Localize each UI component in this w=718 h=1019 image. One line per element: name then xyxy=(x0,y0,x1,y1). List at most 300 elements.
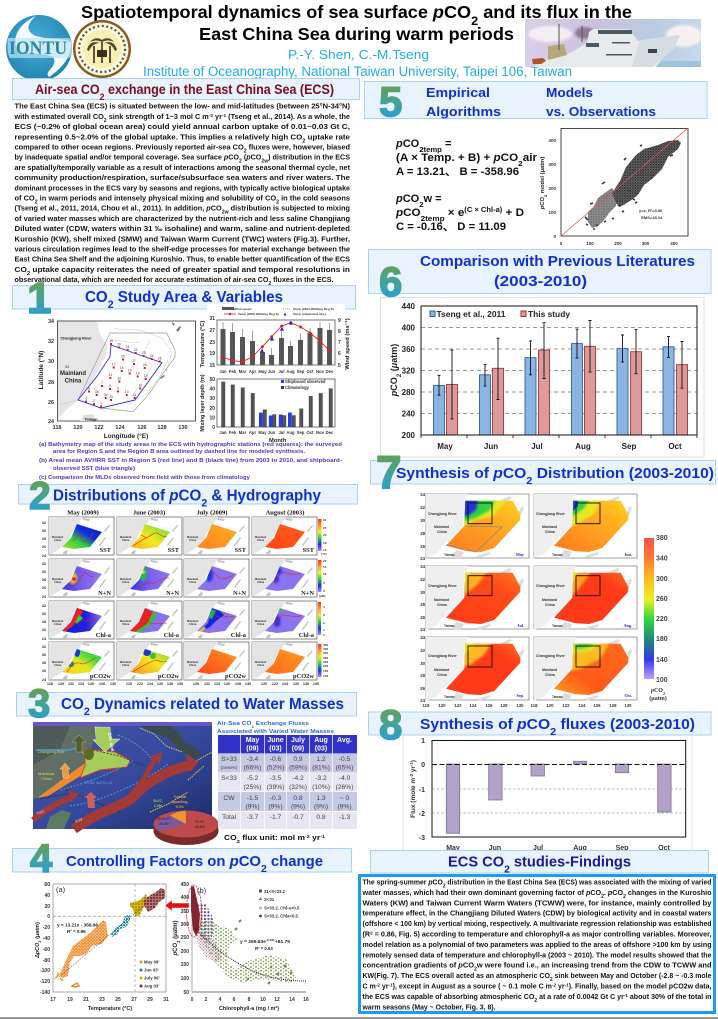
row: Chl-a: China xyxy=(122,622,130,626)
flux table: -0.5 xyxy=(339,756,351,763)
chart b: chlorophyll vs pCO2: 31<S<33.2 xyxy=(264,889,286,894)
heading 3 xyxy=(16,682,356,726)
colour bars: 2 xyxy=(323,621,325,625)
flux table: (10%) xyxy=(312,784,330,791)
station numbers: 33 xyxy=(109,395,113,399)
heading 4 xyxy=(12,837,352,881)
station numbers: 2 xyxy=(93,399,95,403)
panel: 6 comparison xyxy=(368,250,711,457)
chart b: chlorophyll vs pCO2: 16 xyxy=(303,997,309,1003)
intro text block: Diluted water (CDW, waters within 31 ‰ isohaline) and warm, saline and nutrient-depleted xyxy=(14,224,350,233)
row: pCO2w: China xyxy=(54,663,62,667)
axes labels: 28 xyxy=(42,537,46,541)
chart b: chlorophyll vs pCO2: 50 xyxy=(183,990,189,996)
panel: 3 water masses xyxy=(16,682,357,845)
chart b: chlorophyll vs pCO2: 6 xyxy=(233,997,236,1003)
intro text block: are spatially/temporally variable as a result of interactions among the seasonal thermal cycle, net xyxy=(14,163,351,172)
axis ticks: 32 xyxy=(420,505,426,510)
colour scale: 140 xyxy=(656,657,668,664)
flux table: -3.4 xyxy=(247,756,259,763)
flux table: (9%) xyxy=(291,804,305,810)
axes labels: 122 xyxy=(204,682,210,686)
heading: air-sea CO2 exchange: Air-sea CO2 exchange in the East China Sea (ECS) xyxy=(35,82,334,102)
colour bars: 250 xyxy=(323,660,328,664)
flux table: -1.3 xyxy=(339,814,351,821)
row: SST xyxy=(49,517,317,555)
colour bars: 4 xyxy=(323,605,325,609)
algorithm equations: pCO2temp × e(C × Chl-a) + D xyxy=(395,206,524,222)
panel: 4 controlling factors xyxy=(12,837,352,1012)
flux table: Air-Sea CO 2 Exchange Fluxes xyxy=(217,721,309,728)
scatter: model vs observations: 300 xyxy=(642,241,650,246)
axes labels: 28 xyxy=(42,578,46,582)
map: Jun: Taiwan xyxy=(552,553,563,557)
intro text block: compared to other ocean regions. Previously reported air-sea CO 2 fluxes were, however, biased xyxy=(14,142,350,154)
axes labels: 26 xyxy=(42,628,46,632)
axis ticks: 34 xyxy=(420,564,426,569)
station numbers: 13 xyxy=(144,374,148,378)
axes labels: 128 xyxy=(99,682,105,686)
axis ticks: 130 xyxy=(624,703,632,708)
chart a: temperature vs delta pCO2: May 09' xyxy=(144,960,159,964)
map: Sep: Taiwan xyxy=(444,695,455,699)
row: SST: Mainland xyxy=(255,535,267,539)
chart a: temperature vs delta pCO2: y = 13.21x - 358.96 xyxy=(57,922,99,928)
ship photo xyxy=(525,19,702,67)
colour bars: 100 xyxy=(323,674,328,678)
chart: mixing layer depth: Mar xyxy=(239,430,247,435)
row: pCO2w: pCO2w xyxy=(158,673,179,680)
axes labels: 24 xyxy=(42,554,47,558)
intro text block: dominant processes in the ECS vary by seasons and regions, with typically active biological uptake xyxy=(14,183,350,192)
bar chart: pCO2 comparison: Sep xyxy=(622,442,636,451)
chart: temperature and wind speed: Mar xyxy=(239,369,247,374)
intro text block: observational data, which are needed for accurate estimation of air-sea CO2 fluxes in the ECS. xyxy=(14,275,334,287)
axis ticks: 122 xyxy=(454,703,462,708)
chart b: chlorophyll vs pCO2: 400 xyxy=(181,895,189,901)
axis ticks: 124 xyxy=(469,703,477,708)
algorithm equations: pCO2temp = xyxy=(395,138,451,154)
map: water masses: China xyxy=(41,776,52,781)
chart: mixing layer depth: Month xyxy=(269,438,287,444)
chart a: temperature vs delta pCO2: 31 xyxy=(163,997,169,1003)
axes labels: 130 xyxy=(313,682,319,686)
row: Chl-a: China xyxy=(54,622,62,626)
affiliation: Institute of Oceanography, National Taiwan University, Taipei 106, Taiwan xyxy=(143,64,572,79)
heading 6: (2003-2010) xyxy=(494,274,587,290)
colour bars: (°C) xyxy=(321,552,327,556)
findings text: temperature effect, in the Changjiang Diluted Waters (CDW) by biological activity and in coastal waters xyxy=(362,909,712,918)
station numbers: 18 xyxy=(120,366,124,370)
bar chart: pCO2 comparison: This study xyxy=(528,310,571,319)
scatter: model vs observations: pCO2 model (μatm) xyxy=(540,157,548,210)
intro text block: of varied water masses which are characterized by the nutrient-rich and less saline Changjiang xyxy=(14,214,350,223)
chart a: temperature vs delta pCO2: 40 xyxy=(44,893,50,899)
flux table: Total xyxy=(222,814,237,821)
flux table: -1.5 xyxy=(247,795,259,802)
flux table: (9%) xyxy=(337,804,352,810)
heading 5: Empirical xyxy=(426,86,490,100)
flux table: (52%) xyxy=(267,764,284,772)
heading: findings: ECS CO2 studies-Findings xyxy=(448,854,631,876)
chart: temperature and wind speed: Oct xyxy=(307,369,314,374)
column headers: June (2003) xyxy=(133,510,165,516)
chart a: temperature vs delta pCO2: 21 xyxy=(83,997,89,1003)
flux table: Avg. xyxy=(337,737,352,744)
chart b: chlorophyll vs pCO2: 10 xyxy=(260,997,266,1003)
flux bar chart: May xyxy=(446,845,460,852)
map: Jun: Jun. xyxy=(624,552,632,557)
intro text block: community production/respiration, surface/subsurface sea waters and river waters. The xyxy=(14,173,350,182)
axis ticks: 32 xyxy=(420,577,426,582)
scatter: model vs observations: 200 xyxy=(548,186,556,191)
map: study area: Latitude (°N) xyxy=(37,351,45,389)
chart: mixing layer depth: Nov xyxy=(316,430,325,435)
chart: temperature and wind speed: 9 xyxy=(338,318,341,324)
axes labels: 30 xyxy=(42,612,46,616)
map: May: Taiwan xyxy=(444,553,455,557)
station numbers: 28 xyxy=(143,363,147,367)
chart b: chlorophyll vs pCO2: 150 xyxy=(181,962,189,968)
flux table: (59%) xyxy=(289,764,307,772)
map: May: May xyxy=(516,552,525,557)
map: Jul: Taiwan xyxy=(444,624,455,628)
map: water masses: TWC xyxy=(36,809,46,816)
chart b: chlorophyll vs pCO2: 2 xyxy=(205,997,208,1003)
map: Sep: Changjiang River xyxy=(428,654,457,658)
axes labels xyxy=(42,521,319,686)
map: Aug: Changjiang River xyxy=(536,584,565,588)
row: Chl-a xyxy=(49,601,317,639)
chart a: temperature vs delta pCO2: 23 xyxy=(99,997,105,1003)
map: study area: Longitude (°E) xyxy=(104,432,148,440)
colour scale: 100 xyxy=(656,677,668,684)
axes labels: 126 xyxy=(88,682,94,686)
axes labels: 30 xyxy=(42,529,46,533)
pie chart: 28.0% xyxy=(159,822,169,826)
row: pCO2w: China xyxy=(122,663,130,667)
colour bars: 200 xyxy=(323,664,328,668)
colour bars: 31 xyxy=(323,518,327,522)
column headers: August (2003) xyxy=(266,510,304,516)
map: May: China xyxy=(437,530,447,534)
bar chart: pCO2 comparison: Oct xyxy=(668,442,682,451)
row: pCO2w: China xyxy=(189,663,197,667)
row: N+N: N+N xyxy=(98,590,111,597)
colour bars: 27 xyxy=(323,526,327,530)
flux bar chart: 0 xyxy=(421,762,425,769)
chart a: temperature vs delta pCO2: -80 xyxy=(43,958,50,964)
flux bar chart xyxy=(403,733,692,852)
row: pCO2w: pCO2w xyxy=(225,673,246,680)
row: N+N xyxy=(49,559,317,597)
axes labels: 32 xyxy=(42,645,46,649)
station numbers: 25 xyxy=(158,356,162,360)
heading: findings xyxy=(370,850,708,876)
axes labels: 118 xyxy=(47,682,53,686)
colour scale: 300 xyxy=(656,576,668,583)
heading 5: Algorithms xyxy=(426,105,501,119)
pie chart: upwelling, xyxy=(172,800,188,804)
panel: 2 distributions xyxy=(18,475,358,686)
station numbers: 21 xyxy=(126,345,130,349)
flux table: CW xyxy=(223,795,235,802)
map: Jul xyxy=(426,566,529,630)
flux table: (03) xyxy=(269,746,282,752)
heading 1: CO2 Study Area & Variables xyxy=(85,289,283,311)
chart b: chlorophyll vs pCO2: 14 xyxy=(289,997,295,1003)
row: Chl-a: Chl-a xyxy=(299,632,315,639)
logo: IONTU xyxy=(6,15,72,81)
colour bars: 20 xyxy=(323,559,327,563)
map: water masses xyxy=(33,722,212,829)
map: study area xyxy=(37,319,196,440)
legend: temperature and wind xyxy=(207,304,345,317)
colour scale: 380 xyxy=(656,535,668,542)
flux table: -5.2 xyxy=(247,775,259,782)
findings text: KW(Fig. 7). The ECS overall acted as an atmospheric CO2 sink between May and October (-2.8 ~ -0.3 mole xyxy=(362,971,712,983)
bar chart: pCO2 comparison: 240 xyxy=(402,410,416,418)
axes labels: 126 xyxy=(293,682,299,686)
map: study area: 34 xyxy=(65,364,70,369)
station numbers: 17 xyxy=(112,362,116,366)
map: May: Mainland xyxy=(434,525,449,529)
colour bars: 15 xyxy=(323,548,327,552)
flux table: June xyxy=(267,737,284,744)
station numbers: 32 xyxy=(118,376,121,380)
panel: 8 synthesis fluxes xyxy=(368,701,711,852)
map: study area: 122 xyxy=(94,425,104,431)
heading 8: Synthesis of pCO2 fluxes (2003-2010) xyxy=(420,717,695,738)
findings text: Waters (KW) and Taiwan Current Warm Waters (TCWW) were, for instance, mainly controlled by xyxy=(362,898,712,907)
colour scale: (μatm) xyxy=(649,695,667,702)
heading 5 xyxy=(364,78,707,125)
chart a: temperature vs delta pCO2: -140 xyxy=(40,990,50,996)
scatter: model vs observations: 400 xyxy=(670,241,678,246)
figure captions: (c) Comparison the MLDs observed from field with those from climatology xyxy=(39,475,251,481)
map: Oct: Mainland xyxy=(542,668,557,672)
map: study area: 28 xyxy=(48,380,54,386)
axis ticks: 30 xyxy=(420,518,426,523)
chart: mixing layer depth: May xyxy=(258,430,267,435)
chart b: chlorophyll vs pCO2: 200 xyxy=(181,949,189,955)
flux table: 1.2 xyxy=(316,756,326,763)
intro text block: Kuroshio (KW), shelf mixed (SMW) and Taiwan Warm Current (TWC) waters (Fig.3). Further, xyxy=(14,234,350,243)
chart: temperature and wind speed: 8 xyxy=(338,329,341,335)
scatter: model vs observations: 400 xyxy=(548,138,556,143)
map: study area: 30 xyxy=(48,359,54,365)
row: N+N: N+N xyxy=(301,590,314,597)
chart a: temperature vs delta pCO2: -60 xyxy=(43,947,50,953)
intro text block: with estimated overall CO 2 sink strength of 1~3 mol C m -2 yr-1 (Tseng et al., 2014). As a whole, the xyxy=(13,112,350,124)
axes labels: 122 xyxy=(68,682,74,686)
axis ticks: 30 xyxy=(420,661,426,666)
row: SST: Mainland xyxy=(120,535,132,539)
authors: P.-Y. Shen, C.-M.Tseng xyxy=(288,47,429,62)
station numbers: 23 xyxy=(142,351,146,355)
row: N+N: China xyxy=(122,580,130,584)
row: N+N: China xyxy=(54,580,62,584)
colour bars: 0 xyxy=(323,589,325,593)
chart: mixing layer depth: Jun xyxy=(268,430,276,435)
map: Jun: Mainland xyxy=(542,525,557,529)
legend: temperature and wind: Wind speed xyxy=(234,307,251,311)
map: study area: 32 xyxy=(48,339,54,345)
algorithm equations: (A × Temp. + B) + pCO2air xyxy=(396,152,538,168)
heading 1 xyxy=(12,274,356,323)
pie chart xyxy=(153,795,218,845)
row: SST: China xyxy=(54,538,62,542)
heading 7: Synthesis of pCO2 Distribution (2003-2010) xyxy=(396,466,714,486)
findings text: model relation as a polynomial of two parameters was applied to the areas of offshore >100 km by using xyxy=(362,940,712,949)
column headers xyxy=(67,510,304,516)
heading 5: 5 xyxy=(379,78,402,125)
chart: mixing layer depth: Climatology xyxy=(285,385,310,390)
chart: temperature and wind speed: Nov xyxy=(316,369,325,374)
intro text block: representing 0.5~2.0% of the global uptake. This implies a relatively high CO 2 uptake rate xyxy=(14,132,350,144)
chart b: chlorophyll vs pCO2: S>33.2, Chl-a>0.5 xyxy=(264,906,300,910)
pie chart: S>33, xyxy=(195,820,205,824)
chart: temperature and wind speed: Jun xyxy=(268,369,276,374)
chart: temperature and wind speed: Apr xyxy=(249,369,256,374)
map: study area: 118 xyxy=(53,425,61,431)
bar chart: pCO2 comparison: pCO2 (μatm) xyxy=(389,344,402,397)
flux bar chart: 1 xyxy=(421,738,425,745)
map: Oct: Taiwan xyxy=(552,695,563,699)
colour bars: 400 xyxy=(323,647,328,651)
bar chart: pCO2 comparison: 280 xyxy=(402,388,416,397)
row: N+N: N+N xyxy=(166,590,179,597)
flux unit note: CO 2 flux unit: mol m -2 yr -1 xyxy=(224,834,326,844)
heading 5: vs. Observations xyxy=(546,105,656,119)
bar chart: pCO2 comparison: 400 xyxy=(402,324,416,332)
chart a: temperature vs delta pCO2: Jun 03' xyxy=(144,968,159,972)
colour bars: 450 xyxy=(323,643,328,647)
map: Jun: China xyxy=(545,530,555,534)
map: study area: 128 xyxy=(157,425,167,431)
axis ticks: 26 xyxy=(420,686,426,691)
axes labels: 130 xyxy=(245,682,251,686)
flux table: Associated with Varied Water Masses xyxy=(217,729,334,735)
findings text: The spring-summer pCO2 distribution in the East China Sea (ECS) was associated with the mixing of varied xyxy=(362,878,712,890)
chart: mixing layer depth: Mixing layer depth (m) xyxy=(200,374,206,432)
colour scale xyxy=(644,535,668,702)
title: East China Sea during warm periods xyxy=(199,24,514,44)
colour bars: 3 xyxy=(323,613,325,617)
chart b: chlorophyll vs pCO2: 450 xyxy=(181,882,189,888)
chart: mixing layer depth: Shipboard observed xyxy=(285,379,326,384)
scatter: model vs observations: 300 xyxy=(548,162,556,167)
heading 2: 2 xyxy=(29,475,51,518)
axes labels: 24 xyxy=(42,637,47,641)
axis ticks: 24 xyxy=(420,698,426,703)
findings text: warm seasons (May ~ October, Fig. 3, 8). xyxy=(362,1002,496,1011)
chart a: temperature vs delta pCO2: 20 xyxy=(44,904,50,910)
chart a: temperature vs delta pCO2: -20 xyxy=(43,925,50,931)
axes labels: 130 xyxy=(177,682,183,686)
row: N+N: China xyxy=(189,580,197,584)
station numbers: 26 xyxy=(121,354,125,358)
panel: findings xyxy=(360,850,714,1012)
map: study area: 120 xyxy=(73,425,83,431)
chart: mixing layer depth: 30 xyxy=(209,396,215,402)
chart: temperature and wind speed xyxy=(200,316,351,374)
map: water masses: S=31 xyxy=(109,768,119,773)
flux table: -1.7 xyxy=(270,814,282,821)
scatter: model vs observations: RMS=18.24 xyxy=(641,215,663,220)
axis ticks: 28 xyxy=(420,673,426,678)
axis ticks: 126 xyxy=(485,703,493,708)
chart a: temperature vs delta pCO2: 19 xyxy=(67,997,73,1003)
chart a: temperature vs delta pCO2: 17 xyxy=(50,997,56,1003)
row: SST: China xyxy=(189,538,197,542)
heading 5: Models xyxy=(546,86,593,100)
map: study area: China xyxy=(65,378,82,384)
axes labels: 32 xyxy=(42,521,46,525)
station numbers: 19 xyxy=(128,368,132,372)
column headers: July (2009) xyxy=(197,510,227,516)
bar chart: pCO2 comparison: Aug xyxy=(575,442,591,451)
flux table: -3.7 xyxy=(247,814,259,821)
legend: temperature and wind: Temp (shipboard obs.) xyxy=(293,312,326,316)
chart a: temperature vs delta pCO2: R² = 0.96 xyxy=(67,929,86,934)
axes labels: 28 xyxy=(42,620,46,624)
station numbers: 27 xyxy=(132,359,136,363)
scatter: model vs observations: 0 xyxy=(560,241,563,246)
chart: temperature and wind speed: 6 xyxy=(338,351,341,357)
chart a: temperature vs delta pCO2: Temperature (°C) xyxy=(88,1006,132,1012)
station numbers: 10 xyxy=(125,390,129,394)
row: pCO2w: pCO2w xyxy=(90,673,111,680)
map: study area: 124 xyxy=(115,425,126,431)
axes labels: 124 xyxy=(214,682,221,686)
chart b: chlorophyll vs pCO2: y = 269.63e -0.23x +81.75 xyxy=(240,938,291,944)
scatter: model vs observations: 200 xyxy=(614,241,622,246)
row: Chl-a: China xyxy=(257,622,265,626)
axes labels: 120 xyxy=(58,682,64,686)
heading 6: 6 xyxy=(379,258,402,305)
chart: temperature and wind speed: Aug xyxy=(286,369,295,374)
flux table: (81%) xyxy=(312,764,330,772)
axes labels: 122 xyxy=(272,682,278,686)
scatter: model vs observations: 100 xyxy=(586,241,594,246)
heading 2: Distributions of pCO2 & Hydrography xyxy=(53,488,321,510)
scatter: model vs observations: y=x, R²=0.86 xyxy=(639,208,663,213)
station numbers: 22 xyxy=(134,348,138,352)
flux table: -4.0 xyxy=(339,775,351,782)
chart a: temperature vs delta pCO2: 29 xyxy=(147,997,153,1003)
panel: 7 synthesis distribution xyxy=(370,446,716,708)
intro text block: by inadequate spatial and/or temporal coverage. Sea surface pCO2 (pCO2w) distribution in the ECS xyxy=(14,153,350,165)
heading 1: 1 xyxy=(27,274,51,323)
chart: temperature and wind speed: Dec xyxy=(326,369,334,374)
title: Spatiotemporal dynamics of sea surface pCO2 and its flux in the xyxy=(81,2,632,28)
axis ticks: 124 xyxy=(578,703,586,708)
station numbers: 6 xyxy=(88,386,90,390)
axis ticks: 118 xyxy=(531,703,538,708)
axis ticks: 34 xyxy=(420,492,426,497)
figure captions: area for Region S and the Region B area outlined by dashed line for modeled synthesis. xyxy=(53,449,305,455)
axes labels: 30 xyxy=(42,653,46,657)
chart: temperature and wind speed: 31 xyxy=(209,316,215,322)
row: pCO2w xyxy=(49,642,317,680)
chart: mixing layer depth xyxy=(200,374,335,444)
flux table: July xyxy=(291,737,305,744)
title xyxy=(81,2,632,44)
findings text xyxy=(360,876,714,1012)
row: SST: Mainland xyxy=(187,535,199,539)
station numbers: 14 xyxy=(136,372,140,376)
